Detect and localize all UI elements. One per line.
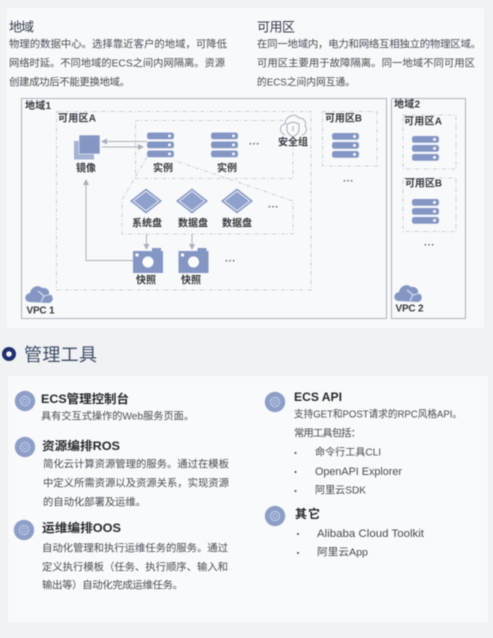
panel: management tools — [8, 376, 488, 622]
title: 资源编排ROS — [42, 438, 120, 453]
tool list: Alibaba Cloud Toolkit — [317, 528, 425, 540]
title: ECS API — [294, 390, 342, 404]
icon: instance 2 — [211, 132, 238, 157]
icon: system disk — [130, 188, 162, 214]
title: 运维编排OOS — [42, 520, 121, 535]
description: 的自动化部署及运维。 — [43, 496, 146, 508]
label: VPC 1: VPC 1 — [26, 306, 55, 316]
title: 其它 — [295, 506, 320, 521]
label: security group: 安全组 — [278, 136, 308, 148]
label: VPC 2: VPC 2 — [396, 304, 424, 314]
label: region 2: 地域2 — [394, 98, 420, 110]
label: data disk 1: 数据盘 — [178, 216, 208, 230]
description: 自动化管理和执行运维任务的服务。通过 — [42, 542, 229, 554]
more zones: ... — [424, 238, 434, 248]
more zones: ... — [343, 174, 353, 184]
description: 定义执行模板（任务、执行顺序、输入和 — [42, 560, 228, 574]
more instances: ... — [249, 136, 259, 148]
arrow: snapshot to image — [83, 179, 133, 260]
tool list: 阿里云App — [317, 546, 368, 558]
description: 中定义所需资源以及资源关系，实现资源 — [43, 476, 230, 490]
instance group outline — [136, 120, 293, 178]
icon: gear — [265, 392, 285, 412]
label: instance 1: 实例 — [153, 162, 173, 174]
item: ECS API — [265, 390, 462, 496]
arrow: system disk to snapshot — [144, 234, 150, 250]
more snapshots: ... — [225, 254, 235, 264]
icon: security group — [280, 115, 306, 137]
heading: availability zone: 可用区 — [257, 20, 295, 34]
text block: region description: 创建成功后不能更换地域。 — [9, 76, 130, 88]
icon: VPC 2 cloud — [394, 285, 422, 302]
description: 具有交互式操作的Web服务页面。 — [41, 410, 194, 422]
panel: region 2 — [392, 98, 466, 318]
section heading: management tools: 管理工具 — [24, 345, 97, 365]
tool list: 命令行工具CLI — [315, 446, 381, 458]
panel: zone B in region 2 — [403, 178, 456, 232]
label: zone B: 可用区B — [405, 178, 442, 190]
icon: gear — [14, 520, 34, 540]
arrow: image to instance — [102, 144, 144, 150]
description: 常用工具包括： — [294, 426, 361, 440]
label: instance 2: 实例 — [217, 162, 237, 174]
arrow: data disk to snapshot — [189, 234, 195, 250]
item: ECS console — [15, 391, 194, 422]
section marker — [2, 347, 16, 361]
panel: zone A — [56, 112, 311, 290]
icon: instance — [332, 133, 359, 158]
title: ECS管理控制台 — [41, 391, 129, 406]
icon: VPC 1 cloud — [25, 286, 53, 303]
icon: gear — [265, 506, 285, 526]
icon: gear — [15, 437, 35, 457]
icon: data disk 2 — [221, 188, 253, 214]
icon: gear — [15, 391, 35, 411]
icon: instance — [412, 199, 439, 224]
text block: region description: 物理的数据中心。选择靠近客户的地域，可降低 — [9, 38, 228, 50]
panel: region 1 — [22, 98, 386, 318]
panel: zone B in region 1 — [322, 112, 377, 166]
panel: zone A in region 2 — [403, 115, 456, 169]
item: OOS — [14, 520, 229, 592]
tool list — [294, 446, 402, 496]
description — [294, 408, 462, 440]
label: data disk 2: 数据盘 — [222, 216, 252, 230]
tool list — [297, 528, 425, 558]
item: ROS — [15, 437, 230, 508]
description: 简化云计算资源管理的服务。通过在模板 — [43, 458, 230, 470]
icon: instance — [412, 136, 439, 161]
description — [43, 458, 230, 508]
text block: region description — [9, 38, 228, 88]
tool list: OpenAPI Explorer — [315, 466, 402, 478]
label: snapshot 1: 快照 — [136, 274, 156, 286]
panel: concepts and architecture — [7, 8, 484, 328]
label: region 1: 地域1 — [25, 99, 51, 112]
label: zone A: 可用区A — [58, 112, 96, 124]
more disks: ... — [268, 200, 278, 210]
label: zone B: 可用区B — [325, 112, 362, 124]
text block: availability zone description — [257, 38, 481, 88]
label: image: 镜像 — [76, 162, 96, 174]
description: 支持GET和POST请求的RPC风格API。 — [294, 408, 462, 420]
label: zone A: 可用区A — [404, 116, 442, 128]
arrow: instance to image — [101, 138, 147, 144]
text block: availability zone description: 可用区主要用于故障隔离。同一地域不同可用区 — [257, 56, 475, 70]
label: system disk: 系统盘 — [132, 216, 162, 230]
tool list: 阿里云SDK — [315, 484, 366, 496]
icon: image — [74, 135, 100, 160]
icon: instance 1 — [147, 132, 174, 157]
item: others — [265, 506, 425, 558]
icon: snapshot 1 — [133, 248, 163, 273]
disk group outline — [122, 157, 293, 234]
text block: region description: 网络时延。不同地域的ECS之间内网隔离。资源 — [9, 56, 226, 70]
text block: availability zone description: 的ECS之间内网互通。 — [257, 76, 355, 88]
text block: availability zone description: 在同一地域内，电力和网络互相独立的物理区域。 — [257, 38, 481, 50]
label: snapshot 2: 快照 — [181, 274, 201, 286]
description: 输出等）自动化完成运维任务。 — [42, 578, 183, 592]
heading: region: 地域 — [9, 20, 34, 34]
description — [42, 542, 229, 592]
icon: snapshot 2 — [178, 248, 208, 273]
icon: data disk 1 — [176, 188, 208, 214]
